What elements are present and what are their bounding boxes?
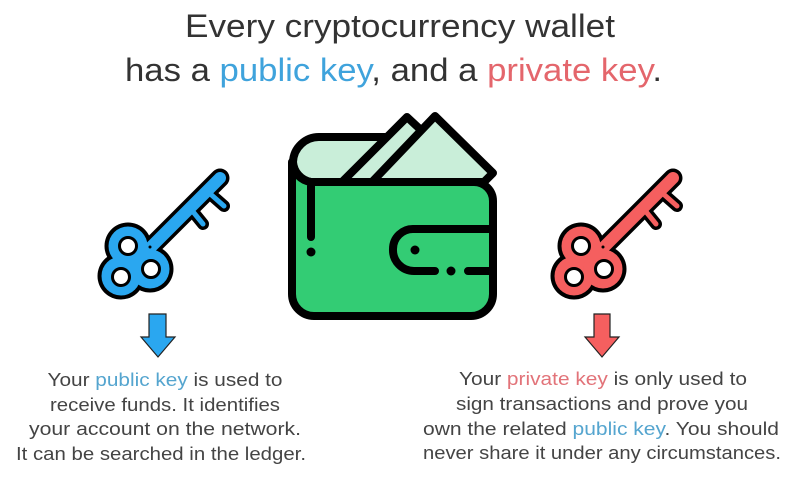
- title: has a public key , and a private key .: [125, 52, 662, 88]
- text: public key description: [16, 370, 306, 464]
- wallet inner seam: [307, 186, 315, 237]
- title: [125, 8, 662, 88]
- text: private key description: never share it under any circumstances.: [423, 443, 781, 463]
- wallet flap: [293, 137, 390, 182]
- text: public key description: It can be searched in the ledger.: [16, 444, 306, 464]
- text: public key description: Your public key is used to: [48, 370, 282, 390]
- text: private key description: [423, 369, 781, 463]
- arrow: private key down: [585, 314, 619, 357]
- wallet clasp: [393, 229, 493, 271]
- wallet front note: [372, 116, 493, 182]
- text: public key description: your account on the network.: [29, 419, 301, 439]
- wallet dots: [306, 246, 456, 276]
- text: public key description: receive funds. It identifies: [50, 395, 280, 415]
- arrow: public key down: [141, 314, 175, 357]
- icon: private key: [550, 178, 677, 300]
- text: private key description: own the related public key . You should: [423, 419, 779, 439]
- text: private key description: Your private key is only used to: [459, 369, 747, 389]
- title: Every cryptocurrency wallet: [185, 8, 615, 44]
- wallet body: [292, 162, 493, 316]
- icon: public key: [98, 178, 224, 300]
- wallet back note: [342, 117, 422, 182]
- icon: wallet: [292, 116, 493, 316]
- text: private key description: sign transactions and prove you: [456, 394, 748, 414]
